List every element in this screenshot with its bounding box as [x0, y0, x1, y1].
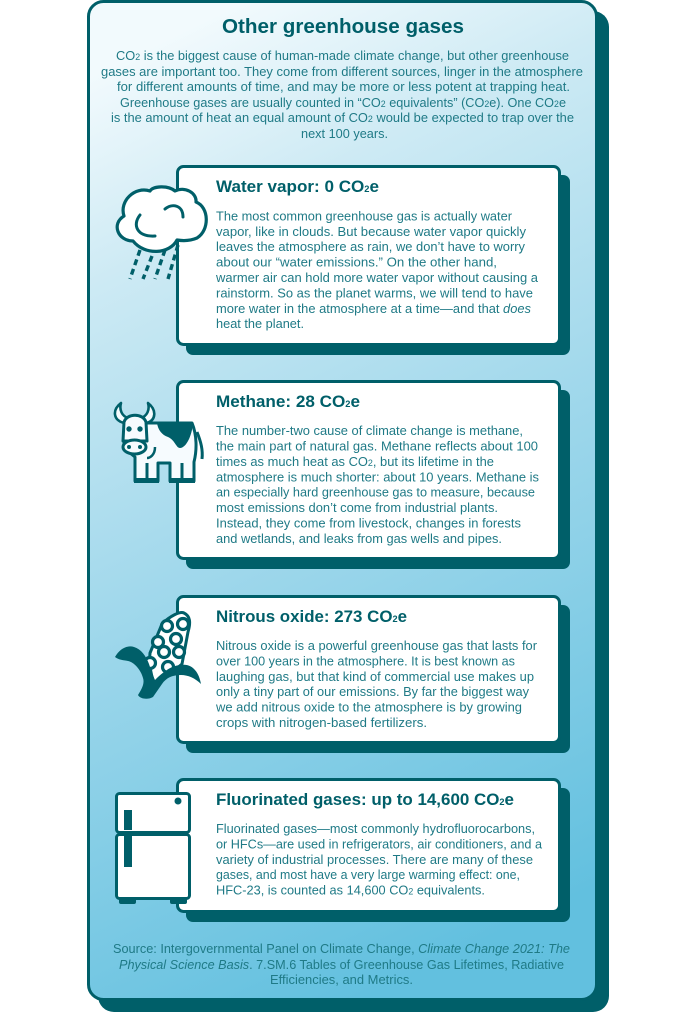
- icon: corn: [115, 613, 201, 699]
- heading: water vapor: Water vapor: 0 CO 2e: [216, 178, 379, 196]
- source note: [113, 941, 570, 987]
- text: fluorinated gases body: variety of industrial processes. There are many of these: [216, 852, 533, 867]
- heading: nitrous oxide: Nitrous oxide: 273 CO 2e: [216, 608, 407, 626]
- text: methane body: The number-two cause of climate change is methane,: [216, 423, 523, 438]
- panel: fluorinated gases card: [178, 780, 570, 922]
- text: methane body: an especially hard greenhouse gas to measure, because: [216, 485, 535, 500]
- source note: Source: Intergovernmental Panel on Climate Change, Climate Change 2021: The: [113, 941, 570, 956]
- text: nitrous oxide body: we add nitrous oxide to the atmosphere is by growing: [215, 700, 522, 714]
- text: fluorinated gases body: Fluorinated gases—most commonly hydrofluorocarbons,: [216, 821, 535, 836]
- text: water vapor body: leaves the atmosphere as rain, we don’t have to worry: [216, 239, 525, 254]
- intro text block: [101, 48, 583, 141]
- text: water vapor body: about our “water emissions.” On the other hand,: [216, 254, 497, 270]
- text: water vapor body: vapor, like in clouds. But because water vapor quickly: [216, 224, 526, 239]
- text: water vapor body: rainstorm. So as the planet warms, we will tend to have: [216, 286, 533, 300]
- text: nitrous oxide body: crops with nitrogen-based fertilizers.: [216, 715, 427, 730]
- text: nitrous oxide body: laughing gas, but that kind of commercial use makes up: [216, 669, 534, 684]
- text: fluorinated gases body: [216, 821, 543, 898]
- text: fluorinated gases body: HFC-23, is counted as 14,600 CO2 equivalents.: [216, 883, 485, 898]
- text: fluorinated gases body: gases, and most have a very large warming effect: one,: [216, 867, 520, 882]
- text: methane body: [216, 423, 539, 546]
- text: water vapor body: warmer air can hold more water vapor without causing a: [215, 270, 539, 285]
- icon: rain cloud: [117, 187, 206, 279]
- panel: nitrous oxide card: [178, 596, 570, 753]
- text: water vapor body: heat the planet.: [216, 316, 304, 331]
- source note: Physical Science Basis. 7.SM.6 Tables of Greenhouse Gas Lifetimes, Radiative: [119, 957, 564, 972]
- text: water vapor body: more water in the atmosphere at a time—and that does: [216, 301, 531, 316]
- text: nitrous oxide body: Nitrous oxide is a powerful greenhouse gas that lasts for: [216, 638, 538, 653]
- text: methane body: most emissions don’t come from industrial plants.: [216, 500, 498, 515]
- text: water vapor body: [215, 208, 539, 331]
- text: water vapor body: The most common greenhouse gas is actually water: [216, 208, 513, 224]
- text: methane body: Instead, they come from livestock, changes in forests: [216, 516, 521, 530]
- intro text block: is the amount of heat an equal amount of CO2 would be expected to trap over the: [111, 110, 574, 125]
- text: methane body: and wetlands, and leaks from gas wells and pipes.: [216, 531, 502, 546]
- icon: refrigerator: [116, 794, 190, 904]
- intro text block: CO2 is the biggest cause of human-made climate change, but other greenhouse: [116, 48, 569, 63]
- intro text block: gases are important too. They come from different sources, linger in the atmosphere: [101, 64, 583, 79]
- source note: Efficiencies, and Metrics.: [270, 972, 413, 987]
- intro text block: next 100 years.: [301, 126, 388, 141]
- text: methane body: the main part of natural gas. Methane reflects about 100: [216, 438, 538, 454]
- intro text block: for different amounts of time, and may be more or less potent at trapping heat.: [117, 79, 570, 94]
- heading: fluorinated gases: Fluorinated gases: up to 14,600 CO 2e: [216, 791, 514, 809]
- panel: water vapor card: [178, 166, 570, 355]
- text: methane body: times as much heat as CO2, but its lifetime in the: [216, 454, 494, 469]
- panel: main background: [88, 2, 609, 1012]
- text: methane body: atmosphere is much shorter: about 10 years. Methane is: [216, 469, 539, 484]
- intro text block: Greenhouse gases are usually counted in “CO2 equivalents” (CO2e). One CO2e: [120, 95, 566, 110]
- text: fluorinated gases body: or HFCs—are used in refrigerators, air conditioners, and a: [216, 836, 543, 851]
- heading: methane: Methane: 28 CO 2e: [216, 393, 360, 411]
- panel: methane card: [178, 382, 570, 569]
- text: nitrous oxide body: [215, 638, 538, 730]
- text: nitrous oxide body: over 100 years in the atmosphere. It is best known as: [216, 654, 515, 668]
- text: nitrous oxide body: only a tiny part of our emissions. By far the biggest way: [216, 684, 529, 699]
- icon: cow: [115, 403, 202, 483]
- title: Other greenhouse gases: [222, 15, 464, 38]
